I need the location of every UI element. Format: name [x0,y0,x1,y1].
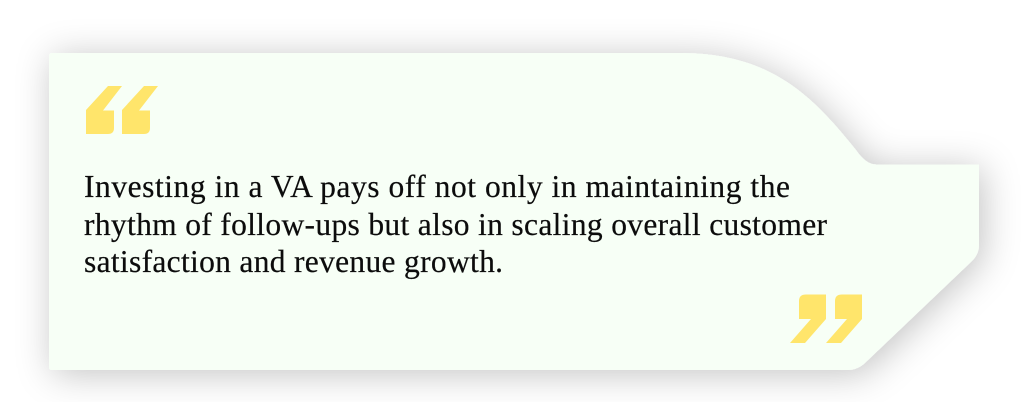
quote text: rhythm of follow-ups but also in scaling overall customer [84,207,828,242]
quote text: satisfaction and revenue growth. [84,244,503,279]
icon: opening quotation mark [86,86,158,134]
icon: closing quotation mark [790,294,862,343]
quote text [84,169,828,279]
quote text: Investing in a VA pays off not only in maintaining the [84,169,790,204]
panel: quote card [49,53,979,370]
